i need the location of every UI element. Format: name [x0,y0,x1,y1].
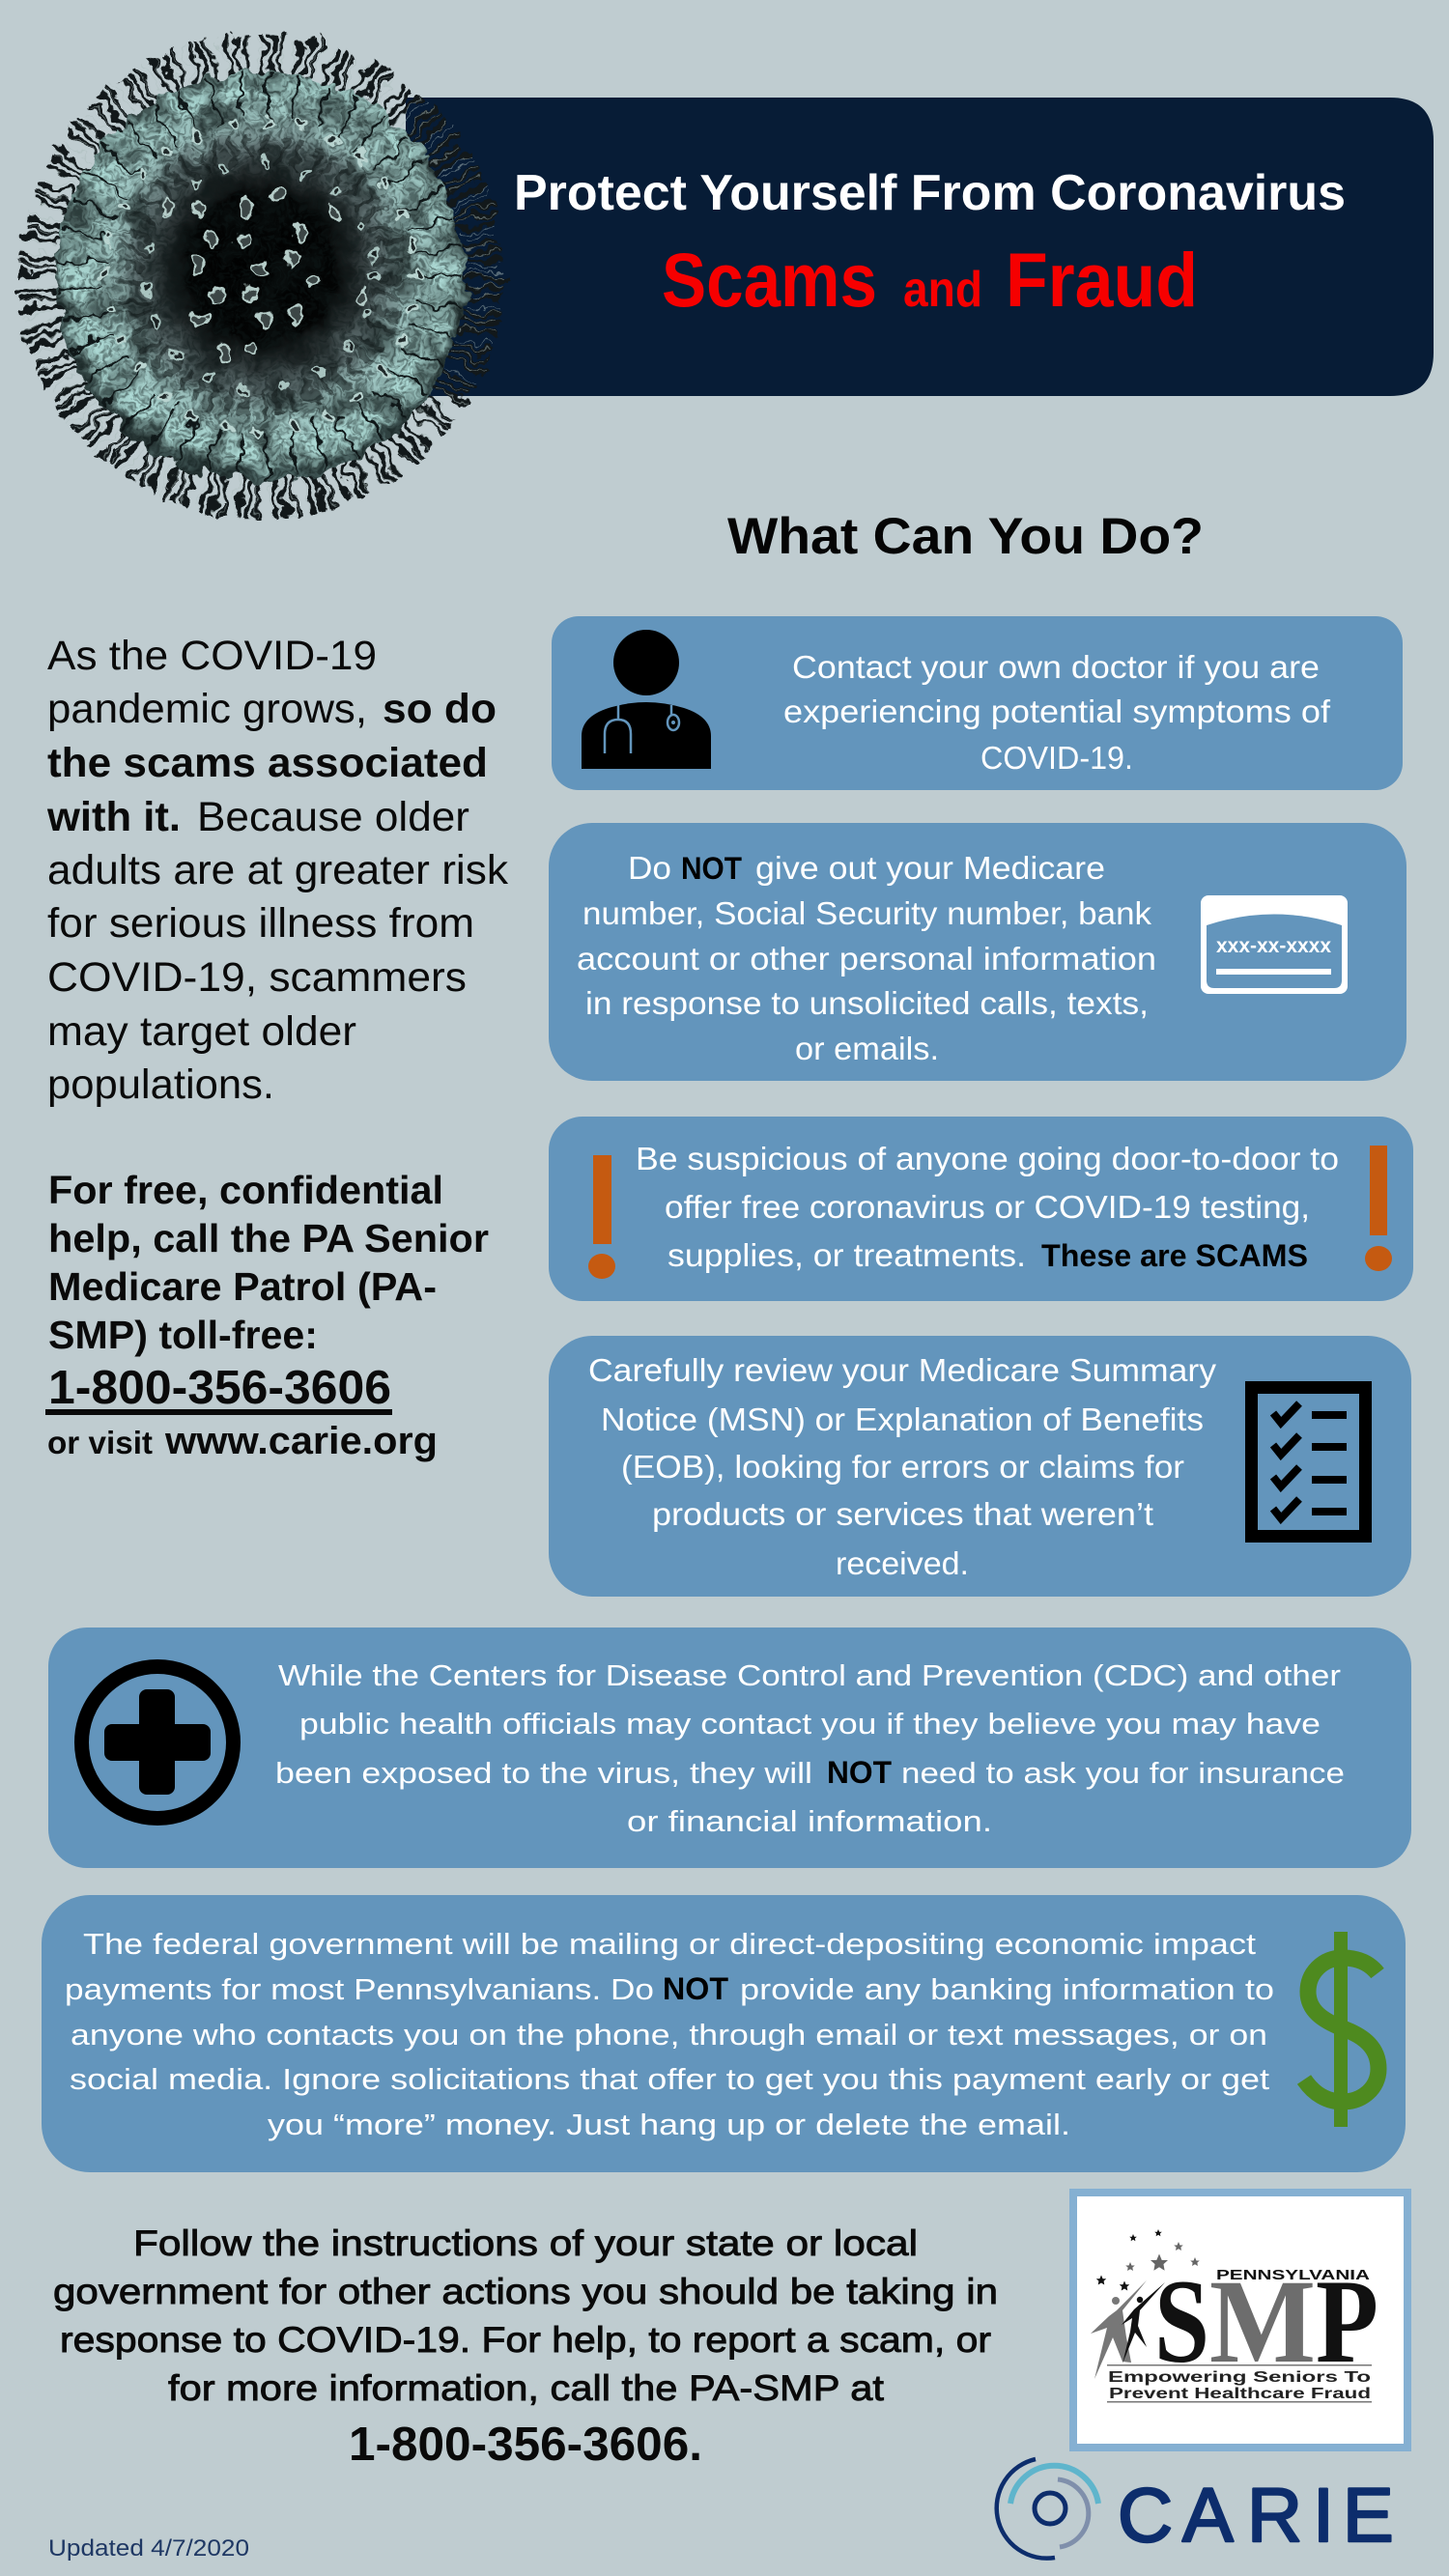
text: economic impact payments: you “more” money. Just hang up or delete the email. [268,2108,1070,2141]
text: contact doctor [783,649,1331,776]
tagline: Empowering Seniors To [1108,2369,1371,2386]
text: review MSN [588,1352,1217,1581]
text: economic impact payments [65,1927,1274,2141]
text: personal information warning: account or other personal information [577,941,1156,977]
icon: social security card: xxx-xx-xxxx [1216,935,1331,957]
text: door-to-door warning: supplies, or treatments. [668,1237,1026,1273]
closing instructions text block: government for other actions you should be taking in [53,2271,998,2311]
closing instructions text block: Follow the instructions of your state or local [133,2222,918,2263]
panel: door-to-door scams [549,1117,1413,1301]
text: personal information warning: number, Social Security number, bank [582,895,1152,931]
intro text block: Because older [197,795,469,840]
panel: CDC and public health officials [48,1628,1411,1868]
intro text block: for serious illness from [47,901,474,947]
subtitle: Scams and Fraud [662,237,1198,323]
stars [1096,2229,1200,2290]
icon: coronavirus particle [26,42,496,511]
intro text block: COVID-19, scammers [47,955,467,1001]
text: personal information warning: Do [628,850,671,886]
updated date: Updated 4/7/2020 [48,2535,249,2562]
text: contact doctor: experiencing potential symptoms of [783,694,1331,729]
icon: social security card [1201,895,1348,994]
text: CDC notice: been exposed to the virus, they will [275,1756,812,1790]
text: CDC notice: public health officials may contact you if they believe you may have [299,1707,1321,1741]
text: economic impact payments: provide any banking information to [740,1972,1274,2006]
text: CDC notice: need to ask you for insurance [901,1756,1345,1790]
panel: do not give out personal information [549,823,1406,1081]
logo: Pennsylvania SMP: PENNSYLVANIA [1216,2267,1370,2283]
help line text block [45,1168,489,1462]
help line text block: or visit [47,1425,153,1460]
SMP letters [1154,2255,1378,2388]
text: door-to-door warning: Be suspicious of anyone going door-to-door to [636,1141,1339,1176]
help line text block: www.carie.org [164,1420,438,1462]
SMP letters: S [1154,2255,1209,2388]
intro text block: pandemic grows, [47,687,367,732]
logo: CARIE [997,2459,1394,2559]
help line text block: SMP) toll-free: [48,1313,318,1357]
icon: doctor with stethoscope [582,630,711,769]
text: personal information warning: or emails. [795,1031,939,1066]
text: contact doctor: Contact your own doctor if you are [792,649,1320,685]
intro text block: As the COVID-19 [47,634,377,679]
text: review MSN: Carefully review your Medicare Summary [588,1352,1217,1388]
panel: contact your doctor [552,616,1403,790]
text: personal information warning: give out your Medicare [755,850,1105,886]
intro text block: with it. [46,795,181,840]
logo: CARIE: CARIE [1118,2472,1394,2558]
text: economic impact payments: social media. Ignore solicitations that offer to get you this payment early or get [70,2062,1269,2096]
title line: Protect Yourself From Coronavirus: Protect Yourself From Coronavirus [514,165,1346,221]
intro text block [46,634,509,1108]
panel: review Medicare Summary Notice [549,1336,1411,1597]
intro text block: adults are at greater risk [47,848,509,893]
text: personal information warning [577,850,1156,1066]
help line text block: Medicare Patrol (PA- [48,1264,437,1309]
text: economic impact payments: payments for most Pennsylvanians. Do [65,1972,654,2006]
help line text block: help, call the PA Senior [48,1216,489,1260]
subtitle: Scams and Fraud: Scams [662,237,877,323]
tagline: Prevent Healthcare Fraud [1109,2386,1371,2402]
tagline [1107,2364,1372,2403]
figures reaching for stars [1091,2280,1165,2379]
intro text block: the scams associated [47,741,488,786]
text: CDC notice: or financial information. [627,1804,992,1838]
text: CDC notice: NOT [827,1755,892,1790]
text: review MSN: products or services that weren’t [652,1496,1153,1532]
SMP letters: M [1209,2255,1316,2388]
heading: What Can You Do?: What Can You Do? [727,508,1204,565]
icon: right exclamation mark [1365,1146,1392,1271]
title banner [406,98,1434,396]
text: personal information warning: NOT [681,851,742,886]
text: review MSN: received. [836,1545,969,1581]
help line text block: For free, confidential [48,1168,443,1212]
subtitle: Scams and Fraud: Fraud [1006,237,1198,323]
text: contact doctor: COVID-19. [980,740,1133,776]
text: door-to-door warning [636,1141,1339,1273]
text: personal information warning: in response to unsolicited calls, texts, [585,985,1149,1021]
text: CDC notice: While the Centers for Disease Control and Prevention (CDC) and other [278,1658,1341,1692]
icon: medical cross in circle [81,1667,234,1818]
closing instructions text block [53,2222,998,2471]
icon: left exclamation mark [588,1155,615,1279]
text: review MSN: Notice (MSN) or Explanation of Benefits [601,1401,1204,1437]
subtitle: Scams and Fraud: and [903,262,982,318]
SMP letters: P [1316,2255,1378,2388]
text: economic impact payments: anyone who contacts you on the phone, through email or text messages, or on [71,2018,1267,2052]
panel: economic impact payments [42,1895,1406,2172]
closing instructions text block: for more information, call the PA-SMP at [168,2367,885,2408]
text: door-to-door warning: These are SCAMS [1041,1238,1308,1273]
text: economic impact payments: NOT [663,1971,728,2006]
icon: checklist [1252,1387,1366,1536]
intro text block: so do [383,687,497,732]
text: review MSN: (EOB), looking for errors or claims for [621,1449,1184,1485]
CARIE swirl mark [997,2459,1098,2559]
intro text block: populations. [47,1062,274,1108]
intro text block: may target older [47,1009,356,1055]
icon: dollar sign [1304,1932,1378,2127]
logo: Pennsylvania SMP [1073,2193,1407,2448]
closing instructions text block: response to COVID-19. For help, to report a scam, or [60,2319,991,2360]
text: CDC notice [275,1658,1345,1838]
text: economic impact payments: The federal government will be mailing or direct-depositing economic impact [83,1927,1256,1961]
phone number: 1-800-356-3606. [349,2419,702,2471]
text: door-to-door warning: offer free coronavirus or COVID-19 testing, [665,1189,1310,1225]
phone number: 1-800-356-3606 [48,1362,391,1414]
